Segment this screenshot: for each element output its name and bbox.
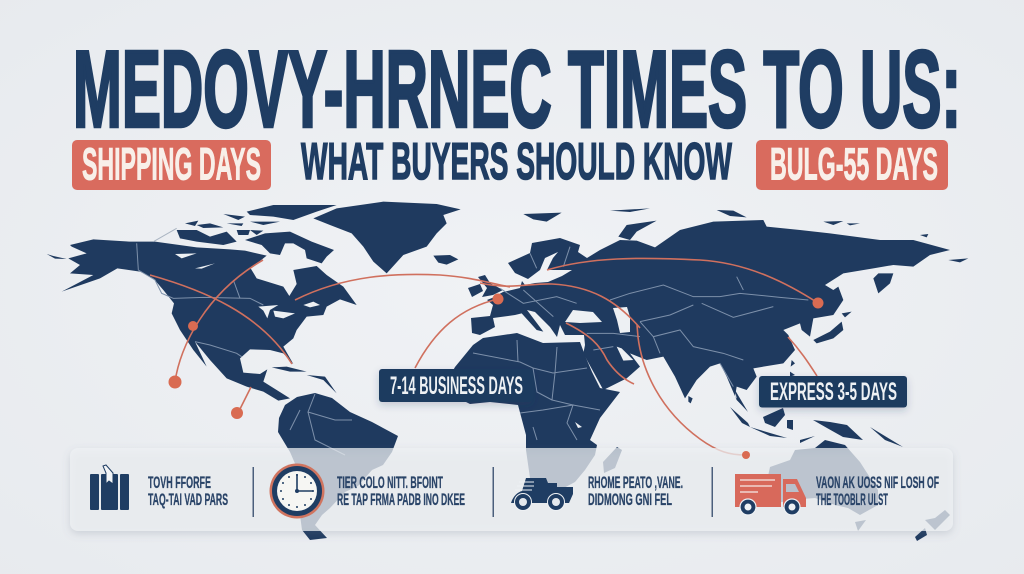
icon: suitcase [90,465,129,510]
callout: express 3-5 days [759,376,907,408]
south america borders [290,394,352,455]
text: item 2 [337,473,465,509]
shipping routes [150,258,818,455]
callout: 7-14 business days [379,369,533,402]
borders [500,247,808,387]
callout: express 3-5 days: EXPRESS 3-5 DAYS [770,378,897,406]
text: item 2: TIER COLO NITT. BFOINT [337,473,443,492]
iceland [433,255,458,265]
seas [565,307,633,361]
southeast asia islands [730,390,903,447]
badge: shipping days [72,138,271,190]
text: item 3: RHOME PEATO ,VANE. [588,473,683,492]
text: item 4 [816,473,939,509]
route markers [168,294,824,419]
south america [278,393,398,540]
world map [47,202,968,541]
route end marker over panel [742,451,750,459]
text: item 1: TOVH FFORFE [148,473,211,492]
greenland [313,202,461,273]
text: item 2: RE TAP FRMA PADB INO DKEE [337,490,465,509]
text: item 1 [148,473,228,509]
british isles [468,275,503,297]
arctic islands [177,230,237,245]
australia [765,440,878,515]
eurasia [471,208,968,410]
icon: navy truck [511,478,573,510]
text: item 3: DIDMONG GNI FEL [588,490,672,509]
badge: shipping days: SHIPPING DAYS [82,138,261,190]
text: item 4: THE TOOBLR ULST [816,490,888,509]
info panel [70,448,953,531]
badge: bulk days [756,138,948,190]
text: item 1: TAQ-TAI VAD PARS [148,490,228,509]
africa [445,333,620,490]
borders [137,228,263,357]
icon: red truck [735,474,806,515]
americas [47,202,461,401]
divider 1 [252,467,254,517]
africa borders [473,340,600,440]
text: item 3 [588,473,683,509]
icon: clock [270,464,324,518]
madagascar [603,447,622,473]
great lakes and inland water [175,253,320,318]
divider 2 [492,467,494,517]
callout: 7-14 business days: 7-14 BUSINESS DAYS [390,372,523,400]
divider 3 [712,467,713,517]
caribbean [272,367,337,393]
